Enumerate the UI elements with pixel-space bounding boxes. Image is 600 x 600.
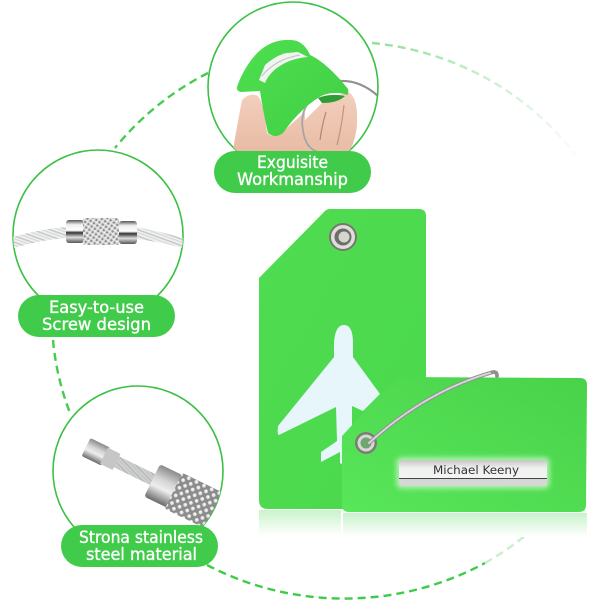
label text 3 [79,528,203,564]
small tag eyelet [355,432,377,454]
name text: Michael Keeny [433,463,519,477]
circle frame 3 [53,386,223,556]
big tag eyelet [329,223,357,251]
label pill 2 [18,295,175,337]
label text 1: Exguisite [257,153,328,172]
label text 1 [237,153,348,189]
label pill 1 [214,151,371,193]
name plate [396,457,550,489]
steel wire loop [369,372,497,443]
photo: cable end and knurled barrel [82,438,220,526]
label text 3: steel material [86,545,197,564]
label text 3: Strona stainless [79,528,203,547]
label text 2: Screw design [42,315,151,334]
label text 1: Workmanship [237,170,348,189]
airplane cut-out [278,325,380,470]
panel: easy-to-use screw design [13,150,183,337]
label pill 3 [61,525,218,567]
photo: wire cable with screw barrel [13,218,183,248]
circle frame 2 [13,150,183,320]
large green luggage tag [259,209,426,509]
circle frame 1 [208,2,378,172]
reflection under tags [259,510,587,537]
panel: strong stainless steel material [53,386,236,567]
photo: hand holding silicone tag [233,40,378,151]
label text 2: Easy-to-use [49,298,144,317]
panel: exquisite workmanship [208,2,378,200]
small green name tag [342,372,587,512]
label text 2 [42,298,151,334]
